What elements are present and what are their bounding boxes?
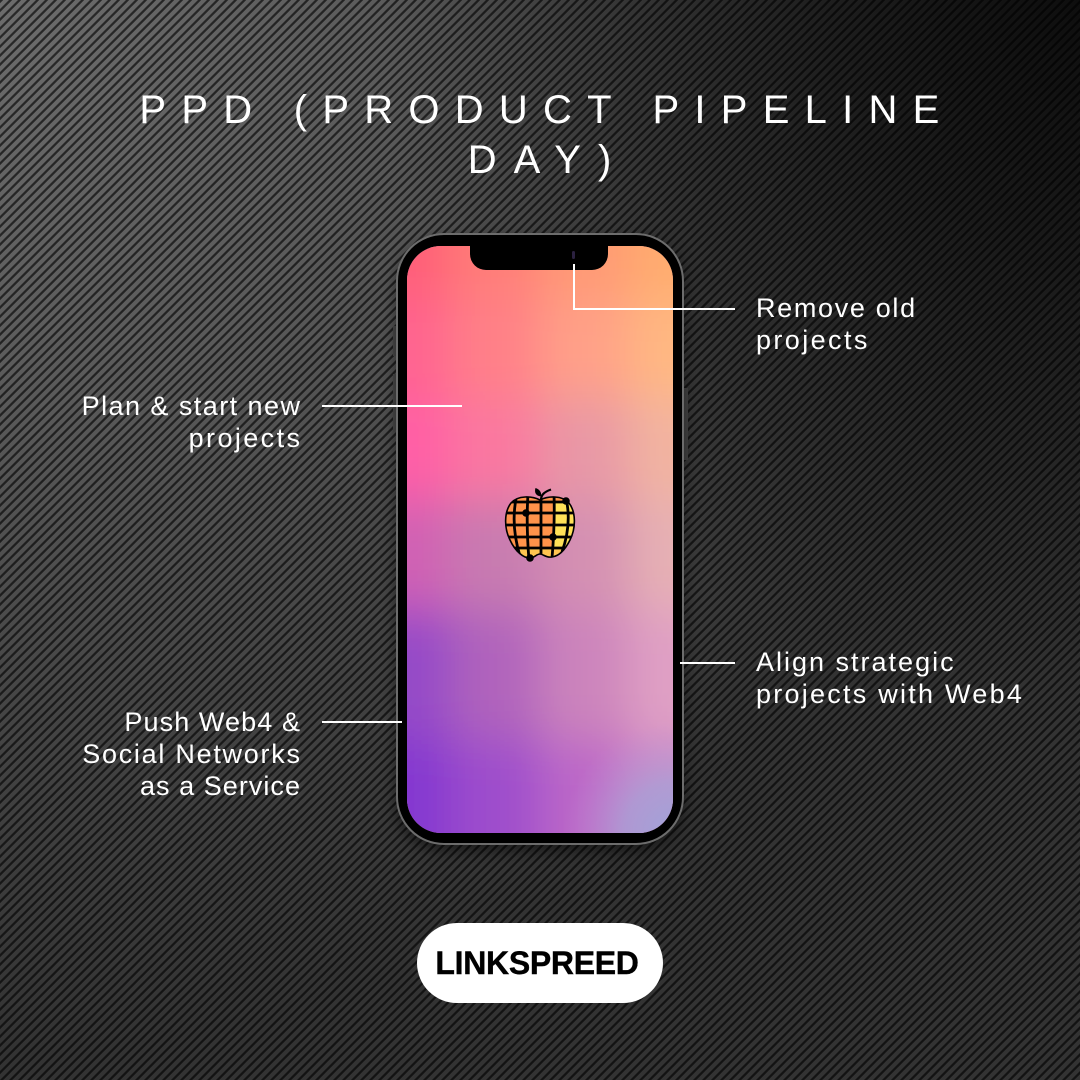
title: PPD (PRODUCT PIPELINE <box>139 88 955 132</box>
callout: remove old projects: Remove old <box>756 293 917 323</box>
icon: grid apple logo <box>504 488 576 562</box>
phone mockup <box>390 233 688 855</box>
phone side buttons <box>393 326 688 460</box>
phone notch <box>470 246 608 270</box>
title <box>139 88 955 182</box>
phone screen gradient <box>407 246 673 833</box>
title: DAY) <box>468 138 628 182</box>
notch camera <box>572 251 575 259</box>
phone body <box>396 233 684 845</box>
callout: remove old projects <box>573 264 917 355</box>
callout: push web4: as a Service <box>140 771 301 801</box>
callout: align strategic projects: Align strategic <box>756 647 956 677</box>
callout: plan and start new projects <box>82 391 462 453</box>
callout: push web4: Social Networks <box>82 739 302 769</box>
logo pill: LINKSPREED: LINKSPREED <box>435 945 639 981</box>
callout: align strategic projects: projects with Web4 <box>756 679 1024 709</box>
callout: plan and start new projects: Plan & start new <box>82 391 301 421</box>
logo pill: LINKSPREED <box>417 923 663 1003</box>
callout: push web4 <box>82 707 402 801</box>
callout: remove old projects: projects <box>756 325 870 355</box>
callout: push web4: Push Web4 & <box>124 707 301 737</box>
callout: plan and start new projects: projects <box>189 423 302 453</box>
callout: align strategic projects <box>680 647 1024 709</box>
